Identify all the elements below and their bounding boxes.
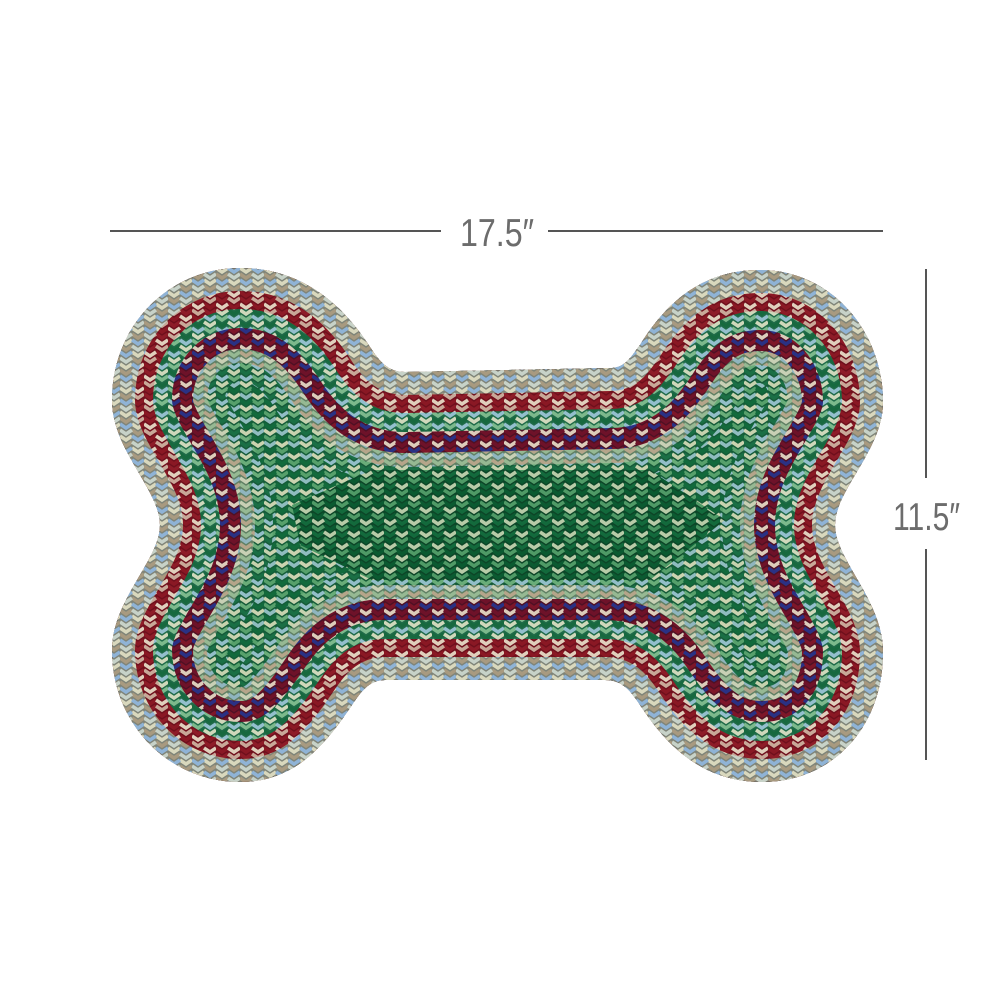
height label: 11.5″ — [893, 496, 960, 539]
height dimension line — [925, 269, 927, 760]
inner green field — [225, 381, 770, 669]
mid green braid zone — [112, 268, 883, 782]
dark red band — [112, 268, 883, 782]
green and blue band — [112, 268, 883, 782]
width dimension line — [110, 230, 883, 232]
navy and red band — [112, 268, 883, 782]
tan-green band — [112, 268, 883, 782]
braided bone-shaped rug — [112, 268, 883, 782]
dark green core — [292, 470, 725, 580]
outer blue and tan band — [112, 268, 883, 782]
width label: 17.5″ — [460, 212, 534, 255]
